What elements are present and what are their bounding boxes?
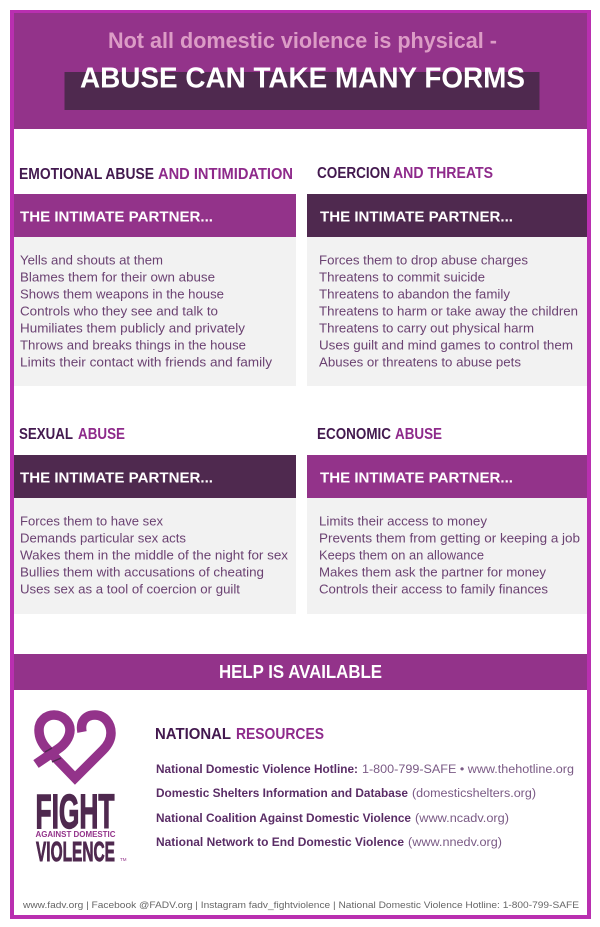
wordmark: VIOLENCE [36,836,115,867]
heading: ABUSE [78,426,125,443]
list: Limits their contact with friends and family [20,356,273,370]
heading [155,726,324,743]
list: Bullies them with accusations of cheating [20,566,264,580]
national resources [155,726,574,849]
list: Controls who they see and talk to [20,304,218,318]
list: Threatens to carry out physical harm [319,322,534,336]
list: Demands particular sex acts [20,532,186,546]
resource: shelters: Domestic Shelters Information and Database [156,788,408,800]
help banner [14,654,587,690]
panel header bar: THE INTIMATE PARTNER... [320,470,513,486]
panel: economic abuse [307,426,587,614]
list: Shows them weapons in the house [20,288,224,302]
panel: sexual abuse [14,426,296,614]
heading: ECONOMIC [317,426,391,443]
heading: AND INTIMIDATION [158,166,293,183]
resource: hotline: National Domestic Violence Hotline: [156,764,358,776]
footer text: www.fadv.org | Facebook @FADV.org | Instagram fadv_fightviolence | National Domestic Violence Hotline: 1-800-799-SAFE [22,900,579,911]
list: Wakes them in the middle of the night for sex [20,548,289,562]
resource: hotline: 1-800-799-SAFE • www.thehotline.org [362,764,574,776]
title: ABUSE CAN TAKE MANY FORMS [80,62,525,94]
list: Yells and shouts at them [20,254,163,268]
heading: ABUSE [395,426,442,443]
list [14,498,296,614]
wordmark: FIGHT [36,786,114,839]
list: Controls their access to family finances [319,582,548,596]
panel: emotional abuse [14,166,296,386]
panel header bar [307,194,587,237]
resource: network: (www.nnedv.org) [408,837,502,849]
wordmark: AGAINST DOMESTIC [36,830,116,839]
list [14,237,296,386]
list: Keeps them on an allowance [319,548,484,562]
list: Threatens to commit suicide [319,270,485,284]
resource: network [156,837,502,849]
heading [317,165,493,182]
list: Limits their access to money [319,514,488,528]
list: Threatens to harm or take away the children [319,304,578,318]
list: Throws and breaks things in the house [20,338,246,352]
list [307,498,587,614]
help banner: HELP IS AVAILABLE [219,662,382,682]
resource: shelters: (domesticshelters.org) [412,788,536,800]
list: Forces them to drop abuse charges [319,254,528,268]
list: Makes them ask the partner for money [319,566,547,580]
list: Humiliates them publicly and privately [20,322,246,336]
list: Forces them to have sex [20,514,164,528]
panel: coercion and threats [307,165,587,386]
header banner [14,13,587,129]
resource: hotline [156,764,574,776]
list: Uses sex as a tool of coercion or guilt [20,582,241,596]
list: Threatens to abandon the family [319,288,511,302]
heading [19,426,125,443]
heading: EMOTIONAL ABUSE [19,166,154,183]
wordmark: TM [120,857,127,862]
panel header bar [307,455,587,498]
heading: SEXUAL [19,426,73,443]
icon: heart ribbon [36,715,111,778]
list [307,237,587,386]
subtitle: Not all domestic violence is physical - [108,28,497,53]
heading: COERCION [317,165,390,182]
heading: NATIONAL [155,726,231,743]
panel header bar [14,194,296,237]
list: Uses guilt and mind games to control them [319,338,573,352]
panel header bar: THE INTIMATE PARTNER... [20,208,213,226]
wordmark [36,786,127,867]
resource: coalition: (www.ncadv.org) [415,813,509,825]
heading [19,166,293,183]
resource: shelters [156,788,536,800]
list: Abuses or threatens to abuse pets [319,356,521,370]
resource: network: National Network to End Domestic Violence [156,837,404,849]
heading: AND THREATS [393,165,493,182]
logo [36,715,127,867]
panel header bar: THE INTIMATE PARTNER... [20,470,213,486]
heading: RESOURCES [236,726,324,743]
panel header bar [14,455,296,498]
title backing bar [64,72,540,110]
resource: coalition: National Coalition Against Domestic Violence [156,813,411,825]
panel header bar: THE INTIMATE PARTNER... [320,208,513,226]
list: Prevents them from getting or keeping a job [319,532,580,546]
list: Blames them for their own abuse [20,270,215,284]
